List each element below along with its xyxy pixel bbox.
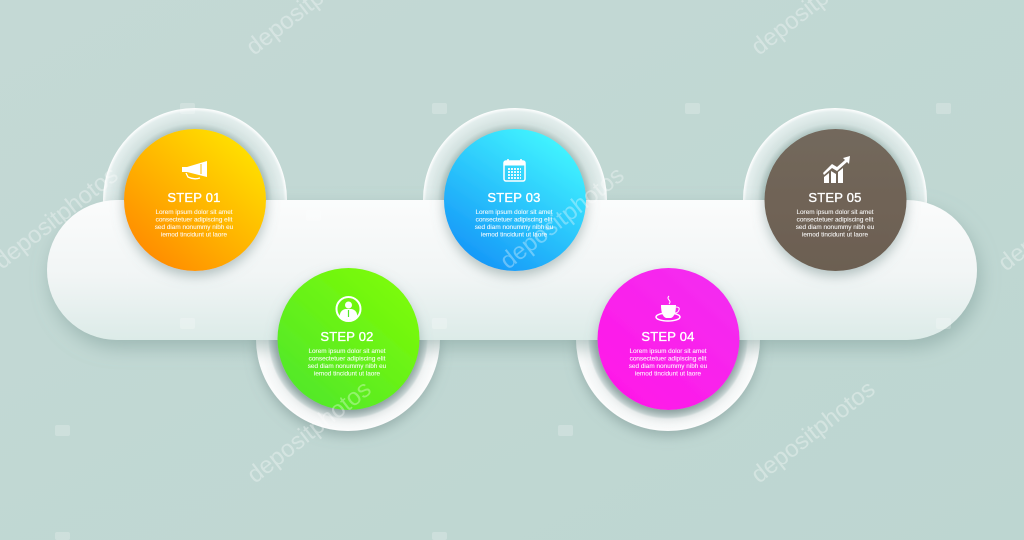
step 01 body text: sed diam nonummy nibh eu [155, 224, 234, 231]
step 04 heading: STEP 04 [641, 329, 695, 344]
step 04 [598, 268, 740, 410]
step 03 body text: iemod tincidunt ut laore [481, 232, 547, 238]
step 01 body text: consectetuer adipiscing elit [156, 216, 233, 224]
step 01 body text: iemod tincidunt ut laore [161, 232, 227, 238]
step 05 [764, 129, 906, 271]
icon: coffee cup [656, 296, 680, 321]
step 04 body text: iemod tincidunt ut laore [635, 370, 701, 378]
watermark camera marks [55, 103, 951, 540]
icon: calendar [504, 159, 525, 181]
icon: growth chart [823, 156, 850, 183]
step 04 body text: consectetuer adipiscing elit [630, 356, 707, 362]
watermarks: depositphotos [746, 375, 880, 489]
step 02 body text: Lorem ipsum dolor sit amet [308, 348, 386, 355]
step 02 body text: iemod tincidunt ut laore [314, 370, 380, 378]
step 05 body text: Lorem ipsum dolor sit amet [796, 209, 874, 216]
step 04 body text: Lorem ipsum dolor sit amet [629, 348, 707, 355]
icon: person badge [336, 297, 360, 321]
icon: megaphone [182, 161, 207, 179]
step 05 body text: consectetuer adipiscing elit [797, 216, 874, 224]
watermarks: depositphotos [242, 375, 376, 489]
step 02 heading: STEP 02 [320, 329, 374, 344]
step 03 body text: sed diam nonummy nibh eu [475, 224, 554, 231]
step 05 body text: sed diam nonummy nibh eu [796, 224, 875, 231]
central rounded bar [47, 200, 977, 340]
step 02 body text: sed diam nonummy nibh eu [308, 363, 387, 370]
step 02 [278, 268, 420, 410]
step 03 [444, 129, 586, 271]
ring: step 05 backing [743, 108, 927, 292]
step 01 body text: Lorem ipsum dolor sit amet [155, 209, 233, 216]
step 02 body text: consectetuer adipiscing elit [309, 356, 386, 362]
ring: step 02 backing [256, 247, 440, 431]
watermarks: depositphotos [495, 161, 629, 275]
step 05 heading: STEP 05 [808, 190, 862, 205]
ring: step 04 backing [576, 247, 760, 431]
ring: step 03 backing [423, 108, 607, 292]
step 03 heading: STEP 03 [487, 190, 541, 205]
step 01 heading: STEP 01 [167, 190, 221, 205]
step 04 body text: sed diam nonummy nibh eu [629, 363, 708, 370]
step 03 body text: consectetuer adipiscing elit [476, 216, 553, 224]
step 05 body text: iemod tincidunt ut laore [802, 232, 868, 238]
step 03 body text: Lorem ipsum dolor sit amet [475, 209, 553, 216]
step 01 [124, 129, 266, 271]
ring: step 01 backing [103, 108, 287, 292]
